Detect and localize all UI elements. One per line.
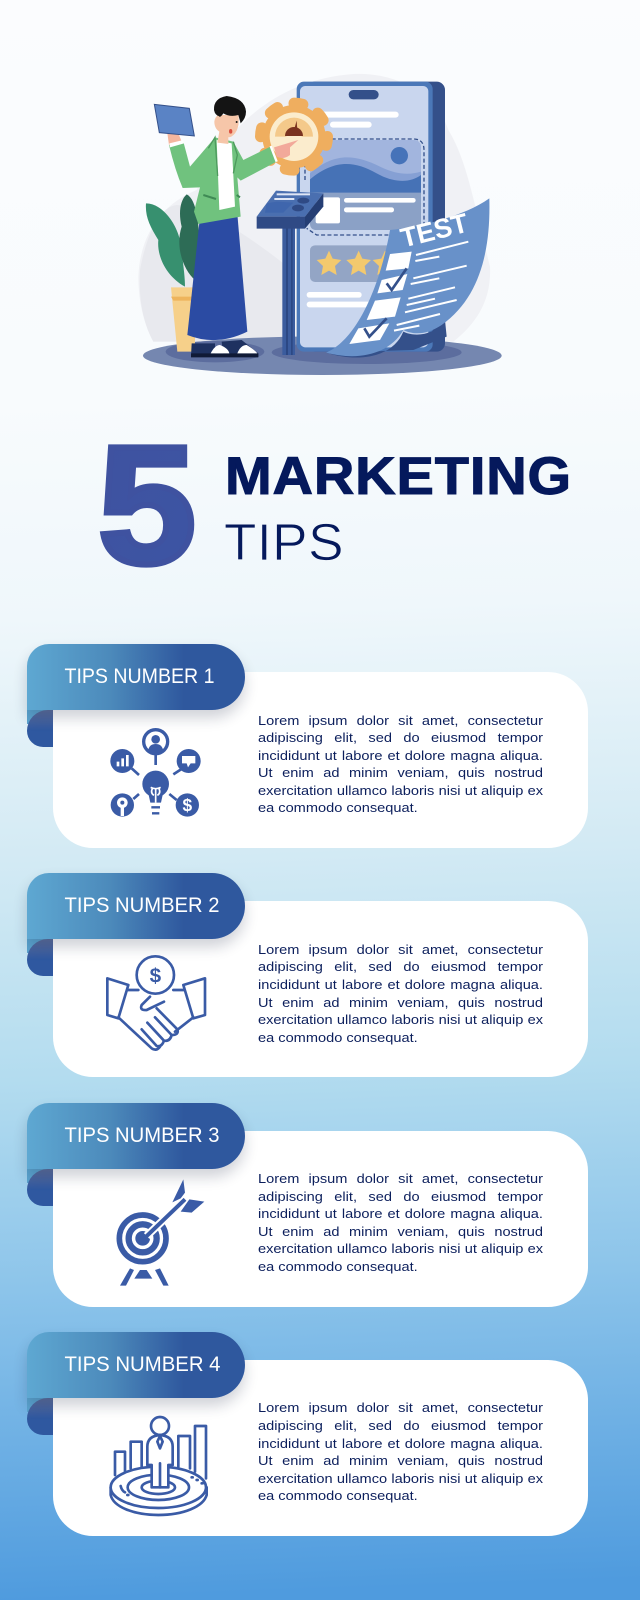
text block: incididunt ut labore et dolore magna aliqua. [258,1436,543,1451]
text block: Ut enim ad minim veniam, quis nostrud [258,1224,543,1239]
ribbon: tips number 3: TIPS NUMBER 3 [64,1124,220,1147]
text block: ea commodo consequat. [258,800,418,815]
text block: exercitation ullamco laboris nisi ut aliquip ex [258,1012,543,1027]
text block: Lorem ipsum dolor sit amet, consectetur [258,712,543,728]
plant [146,194,199,352]
text block: adipiscing elit, sed do eiusmod tempor [258,1189,543,1204]
panel: tip 3 [22,1103,588,1307]
heading: marketing: MARKETING [225,447,572,506]
text block: Ut enim ad minim veniam, quis nostrud [258,995,543,1010]
gear with gauge [261,103,327,170]
panel: tip 1 [20,644,588,848]
text block: exercitation ullamco laboris nisi ut aliquip ex [258,783,543,798]
text block: exercitation ullamco laboris nisi ut aliquip ex [258,1471,543,1486]
text block: Ut enim ad minim veniam, quis nostrud [258,1453,543,1468]
big number 5: 5 [98,411,196,599]
text block: incididunt ut labore et dolore magna aliqua. [258,1206,543,1221]
ribbon: tips number 1 [27,644,245,710]
control stand [257,191,323,355]
icon: target with arrow [116,1180,204,1286]
icon: handshake deal [106,955,206,1051]
phone [297,82,445,352]
text block [258,712,543,815]
heading: tips: TIPS [224,514,344,572]
man [154,96,298,357]
ribbon: tips number 1: TIPS NUMBER 1 [64,665,214,688]
text block: exercitation ullamco laboris nisi ut aliquip ex [258,1241,543,1256]
hero illustration and title [98,74,572,599]
text block: ea commodo consequat. [258,1030,418,1045]
ribbon: tips number 4 [27,1332,245,1398]
panel: tip 2 [21,873,588,1077]
text block: incididunt ut labore et dolore magna aliqua. [258,977,543,992]
text block: Lorem ipsum dolor sit amet, consectetur [258,942,543,957]
icon: ideas network [110,728,201,817]
icon: handshake deal: $ [150,964,162,987]
text block: ea commodo consequat. [258,1259,418,1274]
panel: tip 4 [22,1332,588,1536]
ribbon: tips number 2 [27,873,245,939]
test sheet: TEST [397,207,471,253]
test sheet [326,198,489,358]
ribbon: tips number 2: TIPS NUMBER 2 [64,894,220,917]
text block [258,1400,543,1503]
text block: ea commodo consequat. [258,1488,418,1503]
text block: Ut enim ad minim veniam, quis nostrud [258,765,543,780]
text block: incididunt ut labore et dolore magna aliqua. [258,748,543,763]
ribbon: tips number 4: TIPS NUMBER 4 [64,1353,221,1376]
text block: adipiscing elit, sed do eiusmod tempor [258,959,543,974]
text block: adipiscing elit, sed do eiusmod tempor [258,1418,543,1433]
ribbon: tips number 3 [27,1103,245,1169]
text block [258,1171,543,1274]
text block: adipiscing elit, sed do eiusmod tempor [258,730,543,745]
illustration: marketer testing an app [138,74,502,375]
text block: Lorem ipsum dolor sit amet, consectetur [258,1171,543,1186]
text block: Lorem ipsum dolor sit amet, consectetur [258,1400,543,1415]
icon: ideas network: $ [183,795,193,815]
icon: person on target with bars [109,1416,208,1516]
text block [258,942,543,1045]
